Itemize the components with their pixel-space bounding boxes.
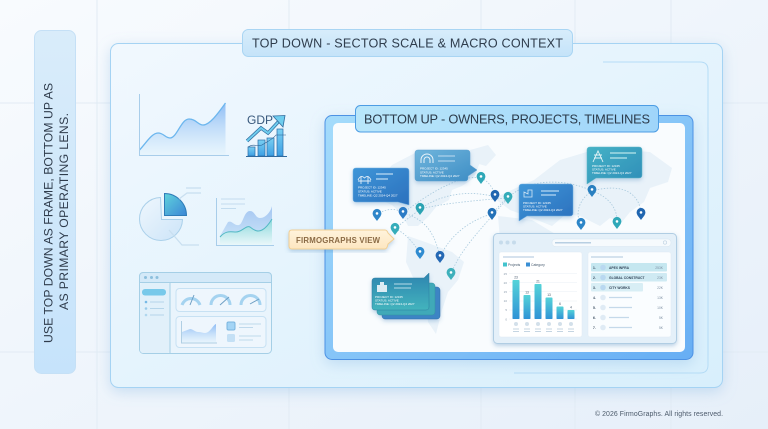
bar chart panel bbox=[499, 252, 582, 337]
bar chart panel: 23 bbox=[514, 276, 518, 280]
callout card: bridge: PROJECT ID: 12345 bbox=[358, 186, 386, 190]
ranking table panel: 7. bbox=[593, 326, 596, 330]
title: top down bbox=[242, 30, 572, 56]
callout: firmographs view: FIRMOGRAPHS VIEW bbox=[296, 236, 381, 245]
callout card: plant: PROJECT ID: 12345 bbox=[523, 201, 551, 205]
ranking table panel: 6. bbox=[593, 316, 596, 320]
ranking table panel: 5K bbox=[659, 326, 664, 330]
banner text: USE TOP DOWN AS FRAME, BOTTOM UP AS bbox=[42, 83, 56, 343]
bar chart panel: 13 bbox=[547, 293, 551, 297]
callout card: tunnel: STATUS: ACTIVE bbox=[420, 170, 444, 174]
bar chart panel: 13 bbox=[525, 290, 529, 294]
ranking table panel: 3. bbox=[593, 286, 596, 290]
bar chart panel: 10 bbox=[504, 299, 507, 303]
callout: firmographs view bbox=[289, 230, 394, 249]
callout card: plant bbox=[519, 184, 573, 221]
callout card stack: building bbox=[372, 273, 440, 319]
icon: area chart bbox=[140, 94, 229, 156]
bar chart panel: 20 bbox=[504, 281, 507, 285]
callout card: bridge bbox=[353, 168, 409, 205]
ranking table panel: GLOBAL CONSTRUCT bbox=[609, 276, 644, 280]
bar chart panel: 6 bbox=[559, 302, 561, 306]
callout card: pylon: STATUS: ACTIVE bbox=[592, 168, 616, 172]
icon: pie chart bbox=[140, 188, 201, 245]
banner text: AS PRIMARY OPERATING LENS. bbox=[57, 113, 71, 310]
dashboard bbox=[494, 234, 676, 344]
icon: GDP chart bbox=[246, 113, 287, 156]
ranking table panel: 13K bbox=[657, 296, 664, 300]
ranking table panel: 5K bbox=[659, 316, 664, 320]
callout card: tunnel: PROJECT ID: 12345 bbox=[420, 166, 448, 170]
callout card: tunnel: TIMELINE: Q2 2024-Q4 2027 bbox=[420, 174, 460, 178]
bar chart panel: 15 bbox=[504, 290, 507, 294]
ranking table panel: 2. bbox=[593, 276, 596, 280]
bar chart panel: 0 bbox=[505, 318, 507, 322]
callout card: bridge: STATUS: ACTIVE bbox=[358, 190, 382, 194]
bar chart panel: 4 bbox=[570, 306, 572, 310]
ranking table panel: 253K bbox=[655, 266, 664, 270]
ranking table panel: 22K bbox=[657, 286, 664, 290]
connection lines bbox=[377, 177, 641, 274]
callout card: bridge: TIMELINE: Q2 2024-Q4 2027 bbox=[358, 194, 398, 198]
bar chart panel: Projects bbox=[508, 263, 521, 267]
callout card: plant: STATUS: ACTIVE bbox=[523, 204, 547, 208]
callout card: pylon bbox=[587, 147, 642, 184]
ranking table panel: 10K bbox=[657, 306, 664, 310]
inner outline panel bbox=[514, 62, 708, 373]
panel: bottom up bbox=[289, 106, 693, 360]
ranking table panel: APEX INFRA bbox=[609, 266, 630, 270]
bar chart panel: 25 bbox=[504, 272, 507, 276]
ranking table panel: 23K bbox=[657, 276, 664, 280]
callout card: pylon: PROJECT ID: 12345 bbox=[592, 164, 620, 168]
left banner bbox=[34, 30, 76, 374]
title: bottom up: BOTTOM UP - OWNERS, PROJECTS, TIMELINES bbox=[364, 112, 650, 126]
callout card stack: building: TIMELINE: Q2 2024-Q4 2027 bbox=[375, 302, 415, 306]
world map bbox=[366, 145, 672, 334]
copyright: © 2026 FirmoGraphs. All rights reserved. bbox=[595, 410, 723, 418]
ranking table panel bbox=[588, 252, 671, 337]
icon: GDP chart: GDP bbox=[247, 113, 273, 127]
callout card: pylon: TIMELINE: Q2 2024-Q4 2027 bbox=[592, 171, 632, 175]
icon: layered area chart bbox=[216, 198, 274, 246]
title: top down: TOP DOWN - SECTOR SCALE & MACRO CONTEXT bbox=[252, 36, 563, 50]
callout card stack: building: PROJECT ID: 12345 bbox=[375, 295, 403, 299]
ranking table panel: 4. bbox=[593, 296, 596, 300]
callout card: plant: TIMELINE: Q2 2024-Q4 2027 bbox=[523, 208, 563, 212]
map pins bbox=[373, 172, 645, 280]
title: bottom up bbox=[356, 106, 658, 132]
bar chart panel: 5 bbox=[505, 308, 507, 312]
icon: dashboard window bbox=[140, 272, 272, 354]
callout card stack: building: STATUS: ACTIVE bbox=[375, 298, 399, 302]
bar chart panel: Category bbox=[531, 263, 545, 267]
ranking table panel: 5. bbox=[593, 306, 596, 310]
banner text bbox=[42, 83, 71, 343]
callout card: tunnel bbox=[415, 150, 477, 181]
ranking table panel: 1. bbox=[593, 266, 596, 270]
ranking table panel: CITY WORKS bbox=[609, 286, 631, 290]
outer panel: top down bbox=[110, 30, 722, 388]
bar chart panel: 21 bbox=[536, 280, 540, 284]
